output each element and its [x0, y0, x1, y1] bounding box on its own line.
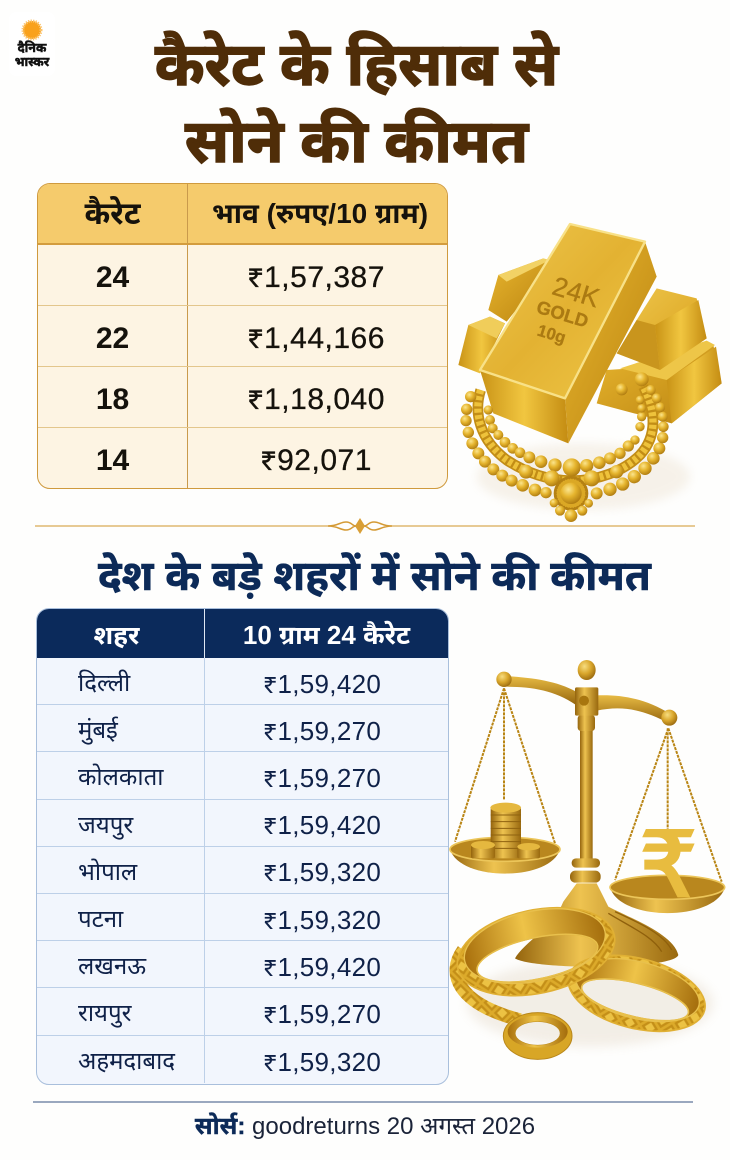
column head: price: भाव (रुपए/10 ग्राम) [212, 198, 428, 229]
row: Patna: पटना [78, 906, 123, 933]
necklace rosette beads [519, 465, 623, 486]
illustration: scales and bangles [449, 660, 726, 1060]
necklace pendant [550, 476, 593, 522]
row: Ahmedabad: अहमदाबाद [78, 1048, 175, 1075]
gold ring [503, 1013, 572, 1059]
table: city prices [36, 608, 449, 1085]
row: Lucknow: ₹1,59,420 [263, 952, 381, 982]
right pan with rupee symbol: ₹ [640, 816, 697, 916]
row: Ahmedabad [78, 1036, 381, 1083]
row: Jaipur [37, 800, 448, 847]
chains [455, 688, 722, 882]
table header [38, 184, 447, 245]
row: Raipur [37, 988, 448, 1036]
row: 18 karat: 18 [96, 382, 129, 416]
row: Kolkata [37, 752, 448, 800]
row: Raipur: ₹1,59,270 [263, 999, 381, 1029]
row: 22 karat: 22 [96, 322, 129, 354]
table: karat prices [37, 183, 448, 489]
logo: Dainik Bhaskar [9, 12, 55, 76]
column head: 10 gram 24 karat: 10 ग्राम 24 कैरेट [243, 620, 410, 650]
bar engraving: 24K [549, 271, 603, 313]
row: 14 karat: ₹92,071 [260, 444, 372, 477]
row: 22 karat [38, 306, 447, 367]
row: 18 karat [38, 367, 447, 428]
divider with ornament [35, 518, 695, 534]
row: Ahmedabad: ₹1,59,320 [263, 1047, 381, 1077]
title line 1: कैरेट के हिसाब से [155, 31, 558, 98]
row: Kolkata: कोलकाता [78, 764, 163, 791]
row: Lucknow [37, 941, 448, 988]
logo wordmark [15, 40, 50, 69]
column head: city: शहर [94, 620, 139, 650]
gold necklace [460, 372, 669, 522]
scale base and column [515, 715, 678, 967]
row: 14 karat [96, 428, 372, 488]
right pan with rupee symbol [610, 816, 725, 916]
row: Delhi: ₹1,59,420 [263, 669, 381, 699]
left pan with coins [450, 803, 560, 874]
necklace outer beads [460, 385, 669, 499]
row: 24 karat: ₹1,57,387 [247, 260, 385, 294]
title [154, 30, 560, 175]
row: Patna [37, 894, 448, 941]
title line 2: सोने की कीमत [185, 108, 528, 175]
source line: goodreturns 20 अगस्त 2026 [252, 1113, 535, 1140]
row: 14 karat: 14 [96, 444, 129, 477]
illustration: gold bars and necklace [458, 222, 722, 522]
row: Kolkata: ₹1,59,270 [263, 763, 381, 793]
row: Mumbai: मुंबई [78, 717, 118, 744]
row: 18 karat: ₹1,18,040 [247, 382, 385, 416]
bar engraving: 10g [535, 321, 568, 347]
section heading: city prices: देश के बड़े शहरों में सोने की कीमत [98, 552, 651, 599]
row: Patna: ₹1,59,320 [263, 905, 381, 935]
scale beam [496, 660, 677, 726]
back gold bars [458, 258, 722, 423]
bar engraving: GOLD [534, 296, 591, 332]
right bangle [560, 942, 713, 1044]
necklace middle band [478, 387, 653, 481]
row: Mumbai [37, 705, 448, 752]
row: Lucknow: लखनऊ [78, 953, 146, 980]
necklace inner beads [484, 372, 649, 476]
footer rule [33, 1101, 693, 1103]
column head: karat: कैरेट [84, 196, 141, 231]
row: Delhi: दिल्ली [78, 670, 130, 697]
source line: सोर्स: [195, 1113, 245, 1140]
row: Bhopal: ₹1,59,320 [263, 857, 381, 887]
row: Jaipur: जयपुर [78, 812, 133, 839]
bar engraving [534, 271, 603, 347]
row: 24 karat: 24 [96, 260, 129, 294]
row: Jaipur: ₹1,59,420 [263, 810, 381, 840]
shadow [467, 960, 713, 1047]
icon: logo sun [22, 20, 42, 40]
front bangle [449, 894, 623, 1009]
shadow [477, 443, 690, 510]
column head: karat [38, 184, 188, 243]
row: Bhopal [37, 847, 448, 894]
row: 22 karat: ₹1,44,166 [247, 322, 385, 354]
row: Raipur: रायपुर [78, 1000, 131, 1027]
table header [37, 609, 448, 658]
back bangle [456, 950, 520, 1020]
row: Mumbai: ₹1,59,270 [263, 716, 381, 746]
logo wordmark: भास्कर [15, 55, 49, 69]
main gold bar [480, 224, 657, 443]
row: Bhopal: भोपाल [78, 859, 137, 886]
row: 24 karat [38, 245, 447, 306]
column head: city [37, 609, 205, 658]
row: Delhi [37, 658, 448, 705]
logo wordmark: दैनिक [18, 41, 46, 55]
